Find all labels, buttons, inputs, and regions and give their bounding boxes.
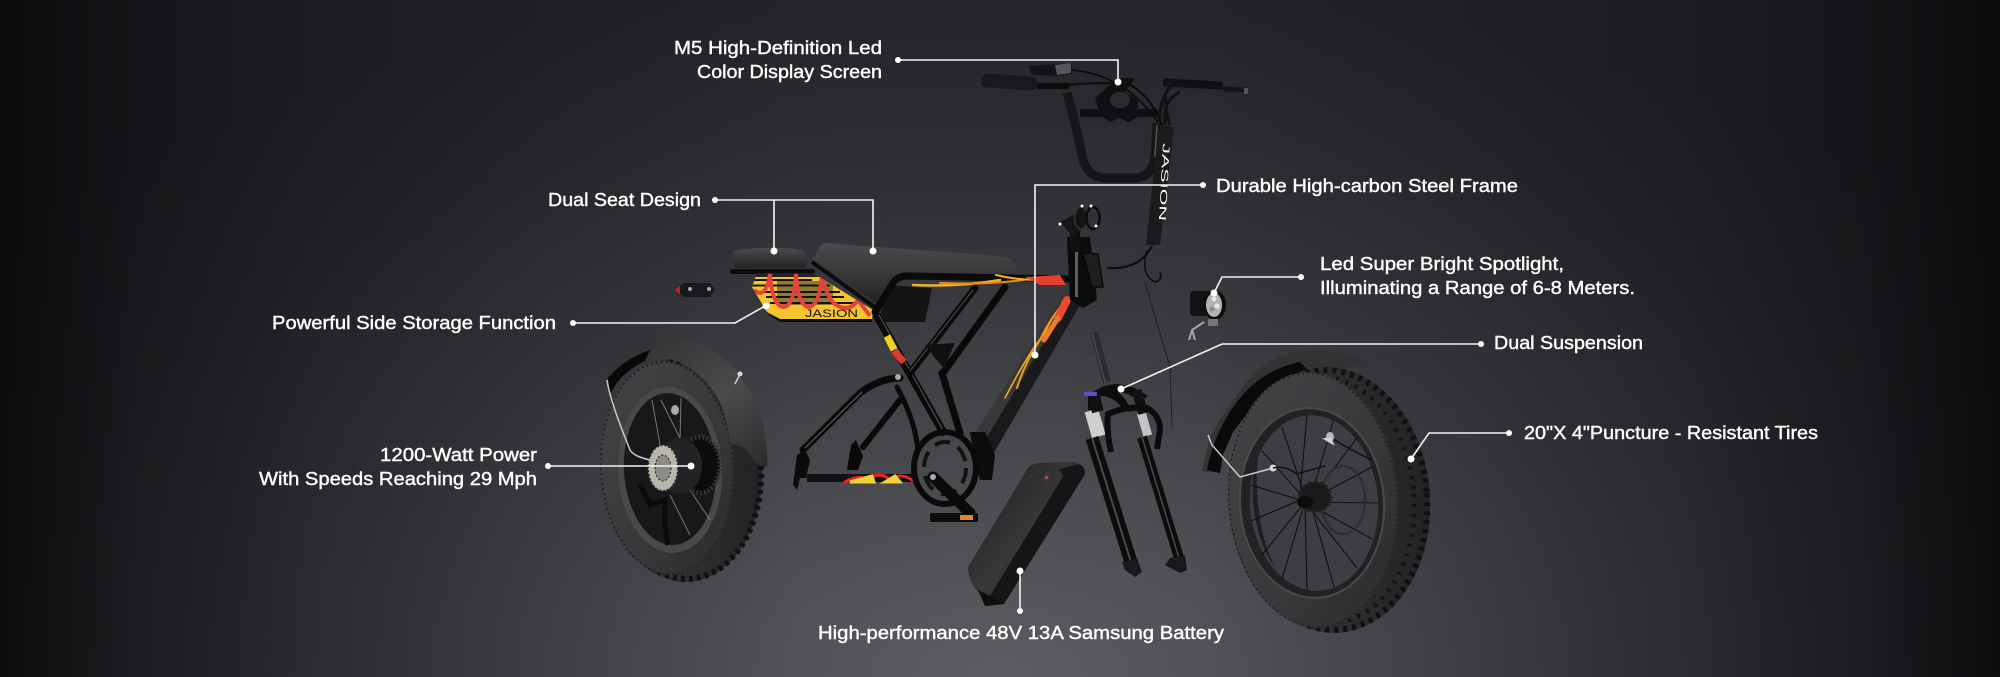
label: spotlight: Led Super Bright Spotlight, <box>1320 254 1564 274</box>
label: suspension <box>1118 333 1643 392</box>
label: M5 display: Color Display Screen <box>697 62 882 82</box>
head tube and stem <box>1058 204 1103 308</box>
label: dual seat: Dual Seat Design <box>548 190 701 210</box>
label: suspension: Dual Suspension <box>1494 333 1643 353</box>
JASION logo on panel: JASION <box>805 308 858 320</box>
LED spotlight <box>1189 290 1226 340</box>
front wheel with fender <box>1202 350 1439 640</box>
label: side storage <box>272 302 770 333</box>
infographic canvas <box>258 40 1818 644</box>
label: motor power: 1200-Watt Power <box>380 445 537 465</box>
label: battery <box>818 568 1224 643</box>
label: spotlight: Illuminating a Range of 6-8 Meters. <box>1320 278 1635 298</box>
rear wheel with fender <box>590 338 768 586</box>
cable sleeve with JASION logo <box>1107 125 1174 427</box>
front suspension fork <box>1084 332 1187 577</box>
label: motor power: With Speeds Reaching 29 Mph <box>259 469 537 489</box>
label: dual seat <box>548 190 876 254</box>
handlebar with display and cables <box>981 63 1248 178</box>
label: tires <box>1408 423 1818 462</box>
tail light reflector <box>675 283 715 297</box>
main seat <box>812 243 1018 308</box>
label: spotlight <box>1210 254 1635 298</box>
JASION logo on sleeve: JASION <box>1156 143 1171 221</box>
battery pack <box>968 462 1085 606</box>
label: motor power <box>259 445 694 489</box>
label: M5 display: M5 High-Definition Led <box>674 38 882 58</box>
label: battery: High-performance 48V 13A Samsung Battery <box>818 623 1224 643</box>
side storage flame panel <box>750 272 875 322</box>
frame tubes <box>793 276 1080 490</box>
label: side storage: Powerful Side Storage Function <box>272 313 556 333</box>
label: tires: 20"X 4"Puncture - Resistant Tires <box>1524 423 1818 443</box>
chainring and crank <box>914 432 995 522</box>
frame flame graphics <box>845 275 1067 482</box>
label: frame: Durable High-carbon Steel Frame <box>1216 176 1518 196</box>
label: M5 display <box>674 38 1122 86</box>
rear seat box <box>730 248 815 274</box>
exploded bike components <box>590 63 1439 640</box>
label: frame <box>1032 176 1518 358</box>
